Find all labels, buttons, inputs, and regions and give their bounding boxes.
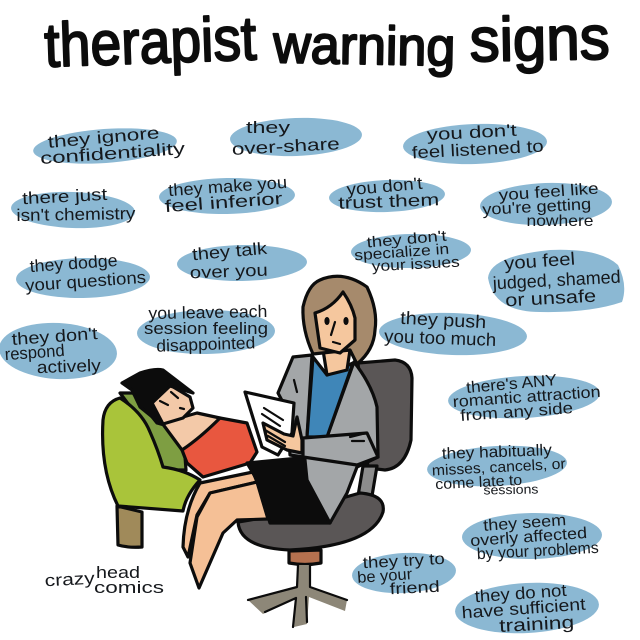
sign: you leave each session feeling disappointed: session feeling xyxy=(144,319,268,338)
sign: they habitually misses, cancels, or come late to sessions: sessions xyxy=(483,482,539,497)
sign: they make you feel inferior: feel inferior xyxy=(164,189,284,216)
sign: they over-share: they xyxy=(246,118,291,137)
credit: crazyhead comics: comics xyxy=(94,578,164,597)
sign: you feel like you're getting nowhere: you're getting xyxy=(482,196,592,219)
illustration: patient and therapist xyxy=(103,276,412,627)
sign: you feel judged, shamed or unsafe xyxy=(488,249,624,312)
therapist xyxy=(245,276,378,523)
sign: they dodge your questions: they dodge xyxy=(29,251,118,276)
sign: they don't respond actively xyxy=(0,320,118,382)
sign: you feel judged, shamed or unsafe: or unsafe xyxy=(505,286,597,310)
sign: they push you too much xyxy=(378,308,528,358)
sign: they try to be your friend: friend xyxy=(389,579,440,598)
sign: you leave each session feeling disappointed: you leave each xyxy=(148,302,268,323)
sign: you feel judged, shamed or unsafe: you feel xyxy=(503,249,576,273)
sign: they habitually misses, cancels, or come late to sessions: they habitually xyxy=(442,442,552,463)
sign: they ignore confidentiality: they ignore xyxy=(47,123,160,152)
sign: they seem overly affected by your problems xyxy=(462,512,602,563)
sign: they push you too much: you too much xyxy=(384,326,497,350)
sign: they don't respond actively: they don't xyxy=(11,324,98,349)
sign: they dodge your questions xyxy=(16,251,150,299)
sign: there's ANY romantic attraction from any side: there's ANY xyxy=(466,372,558,397)
sign: they habitually misses, cancels, or come late to sessions: misses, cancels, or xyxy=(431,456,566,480)
sign: they seem overly affected by your problems: by your problems xyxy=(476,540,599,563)
sign: they habitually misses, cancels, or come late to sessions: come late to xyxy=(435,472,523,493)
sign: they try to be your friend xyxy=(351,550,457,598)
sign: you feel like you're getting nowhere: nowhere xyxy=(526,213,594,230)
sign: you don't feel listened to xyxy=(402,121,548,167)
couch xyxy=(103,393,200,547)
sign: you feel like you're getting nowhere xyxy=(479,181,613,230)
sign: you don't trust them: trust them xyxy=(338,190,440,213)
sign: you feel like you're getting nowhere: you feel like xyxy=(498,181,599,204)
title xyxy=(43,4,610,81)
sign: they don't specialize in your issues xyxy=(351,227,471,275)
sign: they ignore confidentiality xyxy=(32,123,186,168)
sign: there's ANY romantic attraction from any side: romantic attraction xyxy=(452,384,601,411)
sign: they don't specialize in your issues: specialize in xyxy=(354,241,450,264)
sign: they ignore confidentiality: confidentiality xyxy=(40,139,186,168)
sign: there just isn't chemistry xyxy=(10,185,136,230)
sign: they make you feel inferior: they make you xyxy=(168,173,288,200)
sign: there just isn't chemistry: there just xyxy=(22,185,108,208)
sign: they over-share xyxy=(229,116,363,159)
sign: they talk over you: they talk xyxy=(191,239,268,264)
sign: you don't trust them xyxy=(328,174,446,214)
sign: they seem overly affected by your problems: overly affected xyxy=(470,525,588,550)
sign: they talk over you: over you xyxy=(190,261,268,282)
credit: crazyhead comics xyxy=(44,563,164,597)
sign: they try to be your friend: they try to xyxy=(362,551,445,572)
sign: there just isn't chemistry: isn't chemistry xyxy=(16,204,136,225)
sign: they make you feel inferior xyxy=(159,173,295,216)
sign: they don't specialize in your issues: they don't xyxy=(366,227,448,251)
credit: crazyhead comics: head xyxy=(96,563,140,582)
sign: there's ANY romantic attraction from any side xyxy=(447,372,601,425)
sign: they don't specialize in your issues: your issues xyxy=(371,254,460,275)
credit: crazyhead comics: crazy xyxy=(44,569,96,590)
title: warning xyxy=(272,14,456,78)
title: signs xyxy=(469,4,610,75)
office chair xyxy=(238,360,412,627)
sign: they talk over you xyxy=(177,239,307,282)
sign: there's ANY romantic attraction from any side: from any side xyxy=(460,400,574,425)
sign: you leave each session feeling disappointed xyxy=(137,302,275,356)
sign: they dodge your questions: your questions xyxy=(25,268,147,295)
sign: they do not have sufficient training: training xyxy=(499,612,575,636)
sign: they don't respond actively: respond xyxy=(4,341,65,364)
sign: they do not have sufficient training: they do not xyxy=(474,581,567,606)
sign: they habitually misses, cancels, or come late to sessions xyxy=(426,442,568,497)
title: therapist xyxy=(43,4,257,81)
sign: you leave each session feeling disappointed: disappointed xyxy=(156,333,256,356)
sign: they try to be your friend: be your xyxy=(357,566,413,587)
sign: you don't trust them: you don't xyxy=(346,174,424,199)
sign: you don't feel listened to: feel listened to xyxy=(411,137,544,162)
sign: you feel judged, shamed or unsafe: judged, shamed xyxy=(491,267,621,293)
sign: they over-share: over-share xyxy=(231,134,340,159)
sign: they do not have sufficient training xyxy=(454,579,600,637)
patient xyxy=(122,369,268,588)
sign: they seem overly affected by your problems: they seem xyxy=(483,512,567,535)
sign: they push you too much: they push xyxy=(400,308,487,332)
sign: you don't feel listened to: you don't xyxy=(426,121,518,144)
sign: they do not have sufficient training: have sufficient xyxy=(461,595,586,622)
sign: they don't respond actively: actively xyxy=(36,356,102,377)
